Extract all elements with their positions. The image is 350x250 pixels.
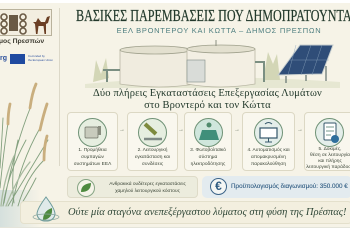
illustration: treatment tanks and solar panel: [85, 40, 340, 88]
arrow: →: [119, 127, 125, 133]
step 5 label: [306, 146, 350, 170]
budget pill: [202, 176, 350, 198]
Interreg and EU logos: rg: [0, 55, 7, 62]
main heading: στο Βροντερό και τον Κώττα: [144, 100, 271, 110]
step 2 label: συνδέσεις: [142, 162, 163, 167]
subtitle: ΕΕΛ ΒΡΟΝΤΕΡΟΥ ΚΑΙ ΚΩΤΤΑ – ΔΗΜΟΣ ΠΡΕΣΠΩΝ: [117, 26, 321, 35]
step 5 card: [304, 112, 350, 171]
carbon neutral pill: [67, 176, 198, 198]
arrow: →: [178, 127, 184, 133]
Interreg and EU logos: [0, 54, 53, 64]
main heading: [93, 88, 322, 110]
step 1 label: συμπαγών: [81, 155, 104, 160]
step 3 label: [190, 148, 226, 167]
main heading: Δύο πλήρεις Εγκαταστάσεις Επεξεργασίας Λυμάτων: [93, 88, 322, 99]
icon: checklist: [315, 118, 344, 147]
step 4 label: παρακολούθηση: [251, 162, 286, 167]
step 3 label: ηλεκτροδότησης: [191, 162, 225, 167]
carbon neutral text: Ανθρακικά ουδέτερες εγκαταστάσεις: [109, 182, 186, 187]
step 2 card: [127, 112, 178, 171]
step 4 label: 4. Αυτοματισμός και: [247, 148, 290, 153]
step 1 label: συστημάτων ΕΕΛ: [74, 162, 111, 167]
icon: euro: €: [215, 179, 222, 193]
step 3 label: σύστημα: [199, 155, 217, 160]
step 5 label: και πλήρης: [318, 159, 342, 164]
reeds illustration: [0, 82, 48, 227]
Interreg and EU logos: Co-funded by: [28, 54, 45, 58]
title: ΒΑΣΙΚΕΣ ΠΑΡΕΜΒΑΣΕΙΣ ΠΟΥ ΔΗΜΟΠΡΑΤΟΥΝΤΑΙ: [76, 6, 350, 25]
icon: compact unit: [78, 118, 107, 147]
icon: leaf: [77, 179, 95, 197]
step 3 label: 3. Φωτοβολταϊκό: [190, 148, 226, 153]
logo: municipality of Prespes: [0, 9, 52, 36]
step 4 label: απομακρυσμένη: [251, 155, 286, 160]
step 4 card: [242, 112, 295, 171]
step 3 card: [184, 112, 232, 171]
icon: euro: [210, 178, 227, 195]
step 1 label: [74, 148, 112, 167]
icon: monitoring screen: [254, 118, 283, 147]
icon: wrench: [138, 118, 167, 147]
step 2 label: εγκατάσταση και: [135, 155, 170, 160]
step 2 label: [135, 148, 170, 167]
step 1 label: 1. Προμήθεια: [78, 148, 107, 153]
step 5 label: θέση σε λειτουργία: [310, 153, 350, 158]
bottom slogan banner: [20, 201, 350, 224]
icon: water drop with leaf: [32, 196, 60, 222]
arrow: →: [234, 127, 240, 133]
budget text: Προϋπολογισμός διαγωνισμού: 350.000 €: [231, 183, 348, 190]
arrow: →: [297, 127, 303, 133]
step 5 label: 5. Δοκιμές,: [319, 147, 341, 152]
step 1 card: [67, 112, 118, 171]
Interreg and EU logos: the European Union: [28, 58, 53, 62]
carbon neutral text: [109, 182, 186, 194]
vertical divider: [59, 8, 60, 166]
carbon neutral text: χαμηλού λειτουργικού κόστους: [115, 189, 180, 194]
slogan: Ούτε μία σταγόνα ανεπεξέργαστου λύματος στη φύση της Πρέσπας!: [68, 207, 347, 218]
icon: solar panel: [194, 118, 223, 147]
step 4 label: [247, 148, 290, 167]
step 2 label: 2. Λειτουργική: [138, 148, 167, 153]
